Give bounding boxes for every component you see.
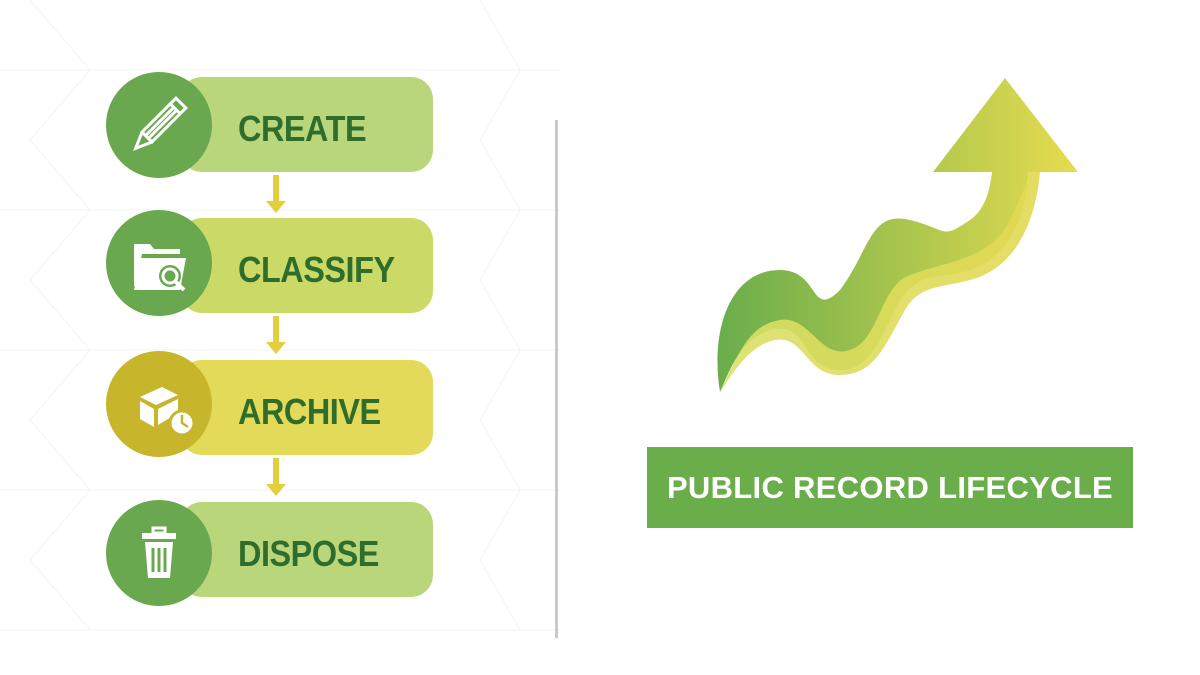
title banner xyxy=(647,447,1133,528)
step: create: CREATE xyxy=(238,108,366,149)
step: classify: CLASSIFY xyxy=(238,249,395,290)
arrow 1 xyxy=(266,175,286,213)
title banner: PUBLIC RECORD LIFECYCLE xyxy=(667,470,1113,505)
step: dispose: DISPOSE xyxy=(238,533,379,574)
arrow 3 xyxy=(266,458,286,496)
icon: pencil xyxy=(106,72,212,178)
arrow 2 xyxy=(266,316,286,354)
divider xyxy=(555,120,558,638)
step: classify xyxy=(106,210,433,316)
step: dispose xyxy=(106,500,433,606)
growth arrow xyxy=(717,78,1078,392)
step: create xyxy=(106,72,433,178)
background pattern xyxy=(0,0,560,630)
step: archive: ARCHIVE xyxy=(238,391,381,432)
icon: folder search xyxy=(106,210,212,316)
step: archive xyxy=(106,351,433,457)
icon: trash xyxy=(106,500,212,606)
icon: box clock xyxy=(106,351,212,457)
